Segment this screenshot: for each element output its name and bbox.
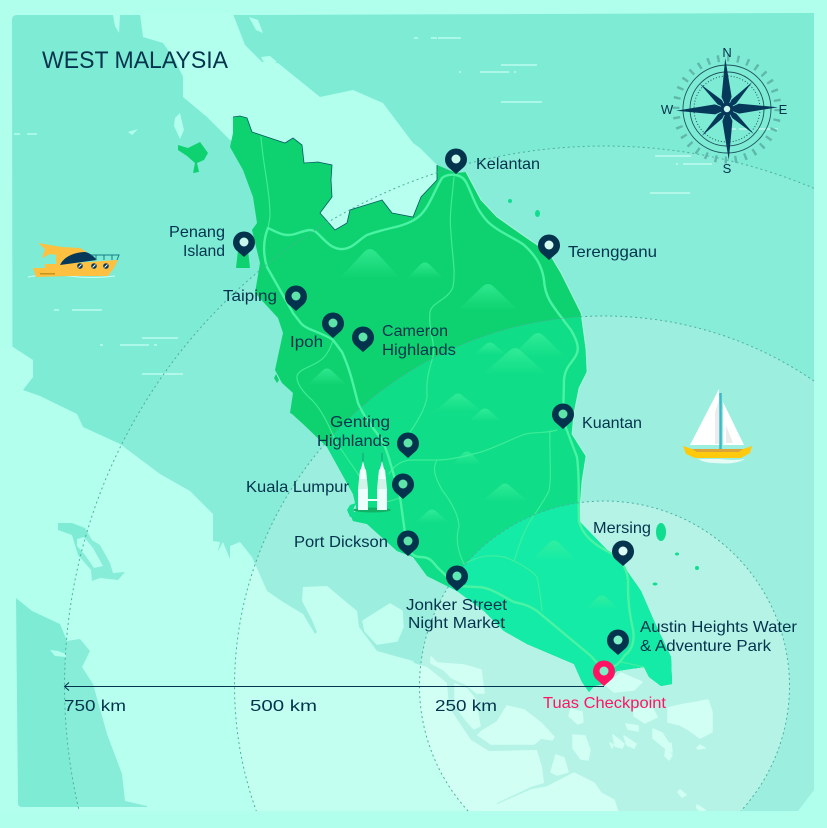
location: Penang Island (169, 224, 255, 260)
peninsula (230, 116, 672, 692)
icon: Petronas towers (353, 453, 391, 512)
location: Kuantan (552, 403, 642, 432)
icon: compass: W (661, 102, 674, 117)
location: Kelantan: Kelantan (476, 156, 540, 173)
location: Jonker Street Night Market (406, 565, 508, 632)
location: Mersing (593, 520, 651, 566)
location: Genting Highlands (317, 414, 419, 458)
location: Kelantan (445, 148, 540, 174)
northern border line (233, 116, 437, 230)
scale labels (64, 698, 497, 715)
location: Tuas Checkpoint (543, 660, 667, 712)
location: Jonker Street Night Market: Night Market (408, 615, 506, 632)
islands: Langkawi and Penang (178, 142, 279, 383)
location: Cameron Highlands (352, 323, 456, 359)
location: Cameron Highlands: Cameron (382, 323, 448, 340)
title: WEST MALAYSIA (42, 47, 228, 74)
location: Penang Island: Island (183, 243, 225, 260)
dashed distance lines (65, 146, 814, 811)
land: lake and inlet (50, 537, 103, 657)
scale labels: 250 km (435, 698, 497, 715)
location: Genting Highlands: Genting (330, 414, 390, 431)
icon: yellow boat (28, 243, 119, 278)
location: Taiping: Taiping (223, 288, 277, 305)
location: Austin Heights Water and Adventure Park: & Adventure Park (640, 638, 772, 655)
location: Kuantan: Kuantan (582, 415, 642, 432)
icon: compass: S (723, 161, 732, 176)
land: islands south of the strait (363, 604, 712, 813)
arrow: distance scale (64, 682, 604, 690)
location: Terengganu (538, 234, 657, 261)
location: Kuala Lumpur: Kuala Lumpur (246, 479, 350, 496)
ring: 250 km (420, 501, 790, 811)
main roads (264, 175, 634, 671)
land: north (140, 14, 437, 232)
location: Austin Heights Water and Adventure Park (607, 619, 798, 655)
thin roads (261, 137, 644, 667)
mountains (307, 249, 619, 609)
land: small north islands (113, 15, 277, 139)
location: Austin Heights Water and Adventure Park: Austin Heights Water (640, 619, 798, 636)
location: Kuala Lumpur (246, 473, 414, 499)
location: Genting Highlands: Highlands (317, 433, 390, 450)
location: Jonker Street Night Market: Jonker Street (406, 597, 508, 614)
icon: compass: E (779, 102, 788, 117)
icon: sailboat (683, 389, 752, 464)
ring: 500 km (235, 316, 814, 811)
ring: 750 km (65, 146, 814, 811)
distance rings (65, 146, 814, 811)
location: Ipoh (290, 312, 344, 351)
location: Penang Island: Penang (169, 224, 225, 241)
coast highlight (466, 172, 587, 521)
location: Port Dickson: Port Dickson (294, 534, 388, 551)
land: south west (0, 347, 544, 814)
location: Tuas Checkpoint: Tuas Checkpoint (543, 695, 667, 712)
icon: compass (661, 45, 788, 176)
location: Cameron Highlands: Highlands (382, 342, 456, 359)
islands: east coast (347, 199, 699, 586)
location: Taiping (223, 285, 307, 311)
location: Mersing: Mersing (593, 520, 651, 537)
scale labels: 750 km (64, 698, 126, 715)
location: Terengganu: Terengganu (568, 244, 657, 261)
location: Ipoh: Ipoh (290, 334, 323, 351)
icon: compass: N (722, 45, 732, 60)
scale labels: 500 km (250, 698, 317, 715)
sea: western islands and coast (16, 523, 147, 807)
sea: wave dashes (14, 38, 778, 374)
location: Port Dickson (294, 530, 419, 556)
